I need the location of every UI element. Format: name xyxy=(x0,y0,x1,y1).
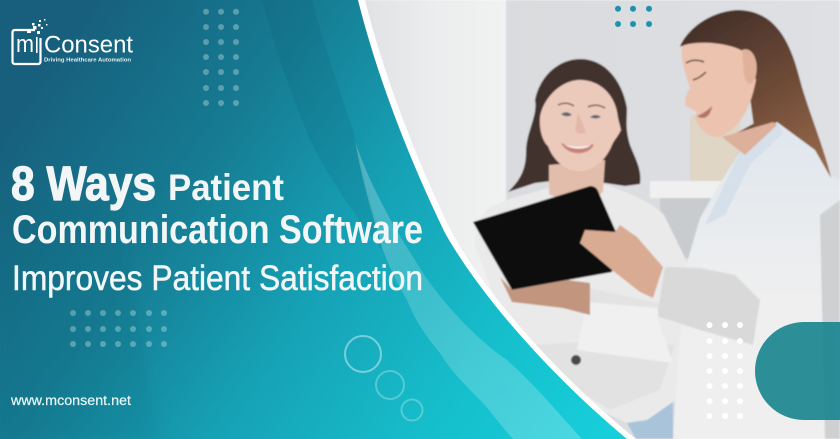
white dot grid on coat xyxy=(706,322,743,419)
seated woman xyxy=(475,59,690,439)
tablet xyxy=(473,186,616,290)
logo tagline: Driving Healthcare Automation xyxy=(44,58,132,64)
decorative circles xyxy=(345,336,422,420)
seated woman face xyxy=(540,80,621,171)
hands xyxy=(500,225,663,315)
seated woman coat xyxy=(475,184,690,423)
logo wordmark: Consent xyxy=(44,32,133,58)
title: Patient: Patient xyxy=(168,167,284,208)
top left dot grid xyxy=(203,9,239,106)
logo letter m: m xyxy=(16,31,34,58)
website url: www.mconsent.net xyxy=(10,393,131,408)
photo background: clinic wall xyxy=(350,0,840,439)
logo icon frame xyxy=(12,30,40,64)
dark swoosh xyxy=(262,0,382,250)
seated woman coat shadow xyxy=(530,340,675,410)
doctor: head and hair xyxy=(680,10,831,178)
logo bar xyxy=(36,37,38,53)
lower left shading xyxy=(0,200,160,439)
logo: mConsent xyxy=(12,19,133,64)
bottom dot grid xyxy=(70,310,167,347)
title: 8 Ways: 8 Ways xyxy=(11,158,156,211)
seated woman jeans xyxy=(627,402,673,439)
teal rounded shape xyxy=(755,322,840,420)
teal dot grid on wall xyxy=(615,6,652,27)
title xyxy=(11,158,423,298)
seated woman neck xyxy=(549,160,605,210)
doctor: lab coat and arm xyxy=(577,120,840,439)
title: Communication Software: Communication Software xyxy=(12,208,423,252)
logo pixel dots xyxy=(27,19,48,34)
seated woman button xyxy=(571,355,581,365)
title: Improves Patient Satisfaction: Improves Patient Satisfaction xyxy=(12,259,423,298)
light swoosh xyxy=(355,140,582,439)
teal curved panel xyxy=(0,0,627,439)
white curved border xyxy=(0,0,636,439)
seated woman hair xyxy=(508,59,640,192)
photo: two women looking at a tablet xyxy=(350,0,840,439)
